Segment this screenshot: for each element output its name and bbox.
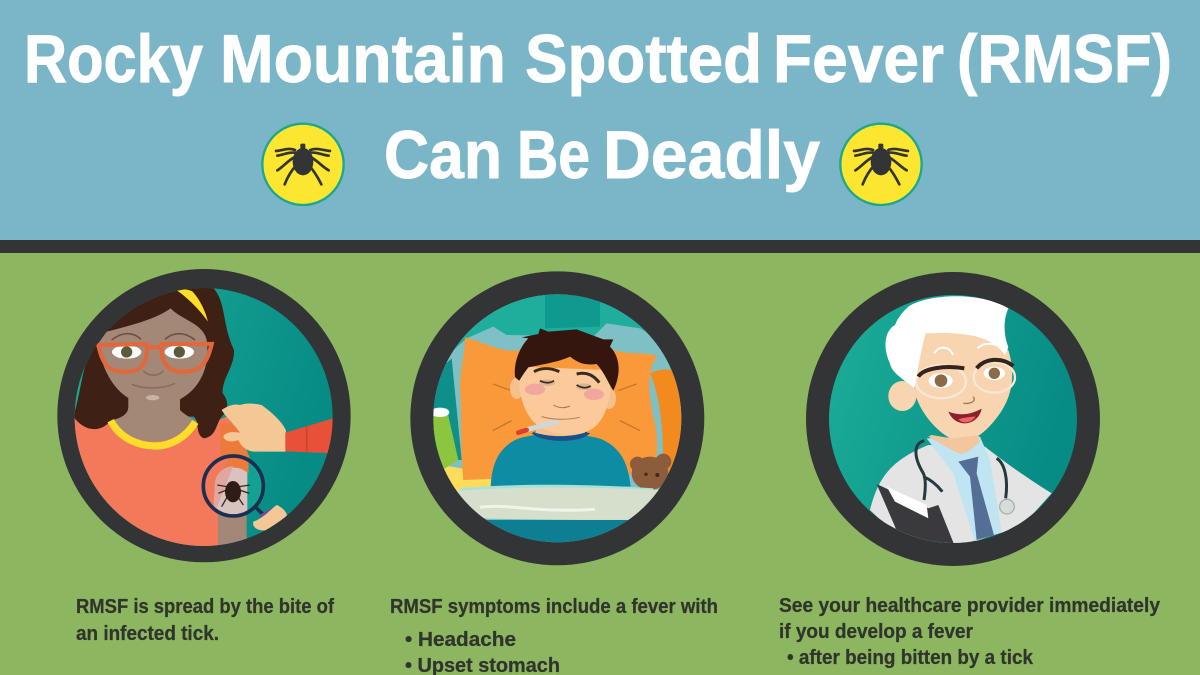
- chin highlight: [146, 395, 159, 400]
- text block: symptoms: • Headache: [405, 629, 516, 651]
- clipboard: [877, 484, 955, 547]
- ear: [888, 381, 916, 411]
- face: [98, 308, 207, 405]
- title line 2: Deadly: [603, 117, 820, 193]
- teal headboard: [454, 294, 646, 350]
- eyes: [112, 345, 141, 359]
- tie: [958, 457, 994, 540]
- helping hand: [222, 403, 286, 452]
- body: [491, 434, 631, 487]
- neck: [928, 435, 980, 454]
- glasses: [98, 344, 212, 372]
- arm sleeve: [220, 423, 250, 458]
- magnifier handle: [255, 507, 263, 514]
- title line 1: Rocky: [24, 21, 203, 97]
- neck: [535, 428, 585, 436]
- magnifier: [214, 458, 262, 514]
- title line 2: [384, 117, 820, 193]
- teddy bear: [630, 456, 642, 470]
- text block: symptoms: [390, 596, 718, 675]
- headband: [176, 289, 208, 322]
- stethoscope: [916, 441, 1007, 500]
- thermometer: [528, 422, 557, 429]
- glasses: [916, 362, 1015, 398]
- under-blanket: [486, 520, 628, 542]
- shirt: [73, 417, 240, 550]
- text block: see your provider: if you develop a fever: [779, 621, 973, 643]
- eyes and brows: [534, 369, 599, 419]
- text block: symptoms: RMSF symptoms include a fever with: [390, 596, 718, 618]
- mouth: [948, 409, 982, 423]
- tired eyes: [539, 379, 555, 386]
- eyes: [929, 373, 953, 388]
- red sleeve: [285, 418, 333, 453]
- shirt: [927, 437, 1002, 542]
- eyebrows: [112, 334, 195, 340]
- pillow: [460, 337, 657, 480]
- title line 2: Be: [517, 117, 590, 193]
- title line 1: [24, 21, 1172, 97]
- ears: [510, 378, 521, 399]
- text block: see your provider: [779, 595, 1161, 669]
- blanket: [456, 488, 658, 520]
- cup: [433, 408, 458, 468]
- illustration: sick boy in bed: [410, 271, 704, 565]
- text block: how RMSF spreads: [76, 596, 334, 645]
- header divider bar: [0, 240, 1200, 253]
- face: [519, 367, 610, 435]
- illustration: doctor: [806, 272, 1100, 566]
- title line 1: (RMSF): [957, 21, 1172, 97]
- lab coat: [870, 445, 1052, 547]
- illustration: girl with tick bite: [57, 269, 351, 562]
- title line 1: Mountain: [220, 21, 506, 97]
- cheeks: [525, 384, 545, 395]
- icon: tick badge right: [840, 124, 922, 205]
- title line 1: Spotted: [525, 21, 762, 97]
- yellow bed: [442, 465, 492, 494]
- eyebrows: [934, 344, 1002, 355]
- left panel: [432, 358, 462, 460]
- shirt collar: [532, 431, 590, 441]
- hair: [515, 328, 619, 391]
- face: [915, 332, 1012, 442]
- icon: tick badge left: [262, 124, 344, 205]
- tick on arm: [217, 485, 250, 507]
- nose: [963, 397, 974, 403]
- text block: how RMSF spreads: an infected tick.: [76, 623, 219, 645]
- text block: see your provider: See your healthcare provider immediately: [779, 595, 1161, 617]
- hair: [885, 296, 1008, 388]
- side orange drape: [650, 370, 682, 474]
- nose and mouth: [132, 371, 175, 388]
- arm: [218, 514, 247, 546]
- collar: [111, 421, 195, 446]
- hair: [73, 288, 234, 438]
- green background panel: [0, 253, 1200, 675]
- title line 2: Can: [384, 117, 502, 193]
- text block: how RMSF spreads: RMSF is spread by the bite of: [76, 596, 334, 618]
- header band: [0, 0, 1200, 240]
- title line 1: Fever: [773, 21, 944, 97]
- neck: [110, 398, 196, 442]
- text block: see your provider: • after being bitten by a tick: [787, 647, 1034, 669]
